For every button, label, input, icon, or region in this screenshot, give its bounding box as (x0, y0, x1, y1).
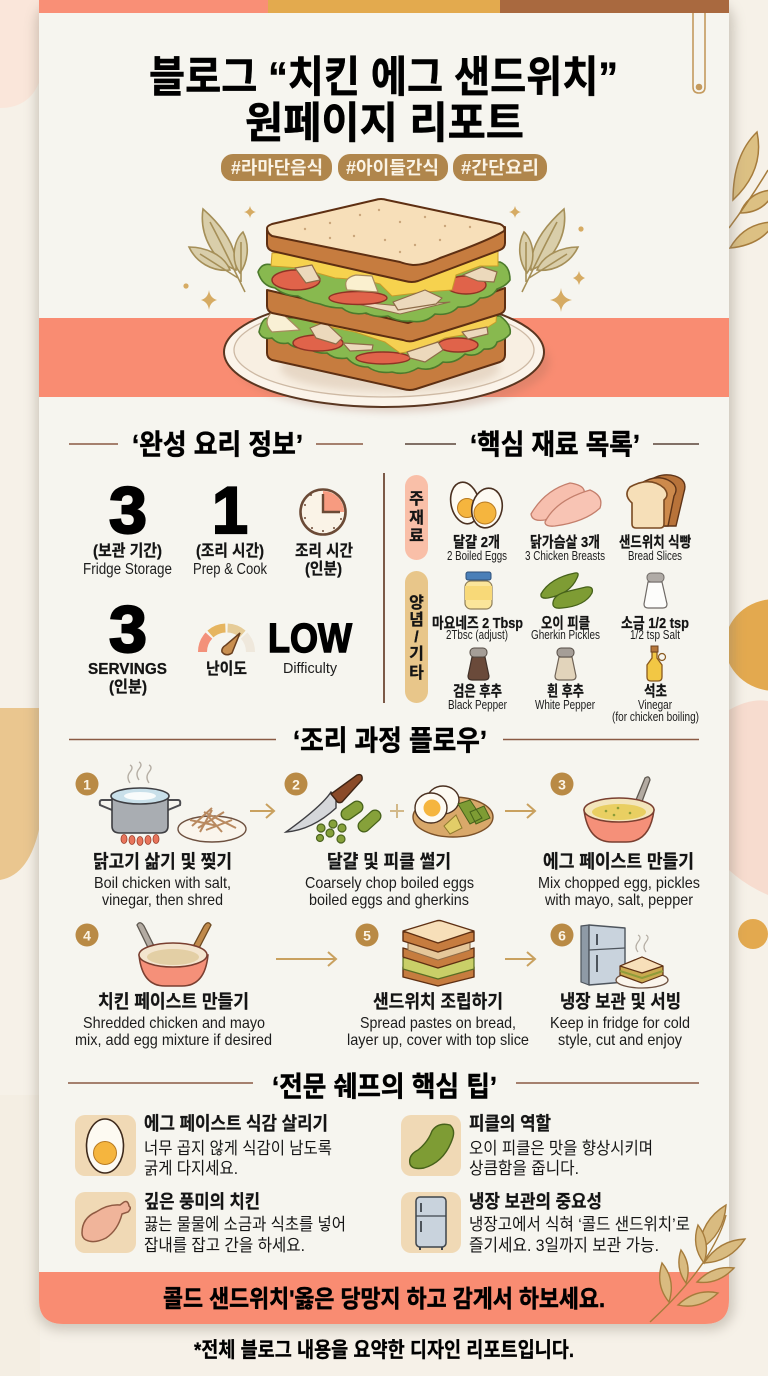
heading: chef tips: ‘전문 쉐프의 핵심 팁’ (272, 1071, 497, 1102)
stat: fridge storage: 3 (109, 473, 147, 547)
tip: role of pickles: 피클의 역할 (469, 1113, 551, 1134)
icon: difficulty gauge (202, 628, 251, 655)
stat: prep and cook time: Prep & Cook (193, 561, 267, 578)
ingredient: chicken breasts: 3 Chicken Breasts (525, 549, 605, 563)
footnote: *전체 블로그 내용을 요약한 디자인 리포트입니다. (194, 1339, 574, 1362)
ingredient: mayonnaise: 2Tbsc (adjust) (446, 628, 508, 642)
step 3: make egg paste: 에그 페이스트 만들기 (543, 851, 694, 872)
ingredient: eggs (447, 480, 507, 563)
arrow: step 2 to 3 (505, 804, 535, 818)
ingredient: vinegar: Vinegar (638, 698, 672, 712)
ingredient: bread slices (619, 475, 691, 563)
step 4: make chicken paste: 치킨 페이스트 만들기 (98, 991, 249, 1012)
step 2: chop eggs and pickles: boiled eggs and gherkins (309, 892, 469, 909)
ingredient: eggs: 2 Boiled Eggs (447, 549, 507, 563)
arrow: step 1 to 2 (250, 804, 274, 818)
step 4: make chicken paste: 4 (83, 928, 91, 944)
top bread (267, 227, 505, 282)
step 2: chop eggs and pickles (284, 772, 493, 909)
panel: finished dish info (69, 429, 363, 696)
category pill: main ingredients (405, 475, 428, 560)
bottom bread (267, 336, 505, 390)
ingredient: chicken breasts (525, 483, 605, 563)
step 3: make egg paste: with mayo, salt, pepper (544, 892, 694, 909)
tip: role of pickles: 상큼함을 줍니다. (469, 1159, 579, 1178)
step 1: boil and shred chicken: 닭고기 삶기 및 찢기 (93, 851, 232, 872)
step 6: refrigerate and serve: Keep in fridge for cold (550, 1015, 690, 1032)
step 5: assemble sandwich: layer up, cover with top slice (347, 1032, 529, 1049)
category pill: seasoning and others: / (414, 629, 419, 646)
step 2: chop eggs and pickles: 2 (292, 776, 300, 792)
hashtag pills: #아이들간식 (346, 158, 439, 178)
stat: fridge storage (83, 473, 172, 578)
icon: sparkles (183, 206, 585, 312)
step 4: make chicken paste: mix, add egg mixture if desired (75, 1032, 272, 1049)
category pill: seasoning and others: 념 (409, 611, 424, 629)
step 3: make egg paste (538, 772, 700, 909)
hashtag pills (221, 154, 547, 181)
category pill: seasoning and others: 기 (409, 645, 424, 663)
title (149, 54, 618, 148)
step 5: assemble sandwich: 샌드위치 조립하기 (373, 991, 503, 1012)
ingredient: white pepper: 흰 후추 (547, 683, 584, 700)
ingredient: black pepper (448, 648, 507, 712)
ingredient: gherkin pickles: 오이 피클 (541, 615, 590, 632)
panel: key ingredients (405, 429, 699, 724)
step 2: chop eggs and pickles: 달걀 및 피클 썰기 (327, 851, 451, 872)
label: difficulty (206, 615, 352, 678)
label: cook time: (인분) (305, 560, 342, 578)
category pill: main ingredients: 주 (409, 491, 424, 508)
stat: servings: 3 (109, 592, 147, 666)
ingredient: bread slices: Bread Slices (628, 549, 682, 563)
ingredient: salt: 1/2 tsp Salt (630, 628, 680, 642)
stat: servings: SERVINGS (88, 661, 167, 678)
ingredient: bread slices: 샌드위치 식빵 (619, 534, 691, 551)
stat: prep and cook time (193, 473, 267, 578)
step 4: make chicken paste: Shredded chicken and mayo (83, 1015, 265, 1032)
ingredient: gherkin pickles: Gherkin Pickles (531, 628, 600, 642)
category pill: main ingredients: 재 (409, 509, 424, 527)
ingredient: white pepper: White Pepper (535, 698, 595, 712)
step 3: make egg paste: 3 (558, 776, 566, 792)
step 1: boil and shred chicken (76, 762, 246, 909)
ingredient: vinegar (612, 646, 699, 724)
hashtag pills: #간단요리 (461, 158, 539, 178)
heading: finished dish info: ‘완성 요리 정보’ (132, 429, 303, 460)
title: 원페이지 리포트 (245, 100, 524, 148)
footer banner text: 콜드 샌드위치'옳은 당망지 하고 감게서 하보세요. (163, 1286, 605, 1313)
ingredient: black pepper: 검은 후추 (453, 683, 502, 700)
tip: deep flavour chicken: 깊은 풍미의 치킨 (144, 1191, 260, 1212)
ingredient: salt (621, 573, 689, 642)
category pill: seasoning and others: 타 (409, 664, 424, 682)
ingredient: black pepper: Black Pepper (448, 698, 507, 712)
tip: role of pickles (401, 1113, 653, 1178)
label: difficulty: Difficulty (283, 660, 337, 677)
step 6: refrigerate and serve: 6 (558, 928, 566, 944)
category pill: seasoning and others (405, 571, 428, 703)
step 6: refrigerate and serve (550, 924, 690, 1049)
icon: clock (300, 490, 346, 534)
stat: servings (88, 592, 167, 696)
plate (224, 297, 550, 412)
step 3: make egg paste: Mix chopped egg, pickles (538, 875, 700, 892)
ingredient: gherkin pickles (531, 573, 600, 642)
ingredient: vinegar: (for chicken boiling) (612, 710, 699, 724)
tip: deep flavour chicken (75, 1191, 346, 1255)
tip: importance of refrigeration: 냉장 보관의 중요성 (469, 1191, 602, 1212)
tip: egg paste texture (75, 1113, 332, 1178)
category pill: seasoning and others: 양 (409, 594, 424, 612)
arrow: step 5 to 6 (505, 952, 535, 966)
label: difficulty: 난이도 (206, 660, 247, 678)
heading: cooking process flow: ‘조리 과정 플로우’ (293, 725, 487, 756)
arrow: step 4 to 5 (276, 952, 336, 966)
tip: importance of refrigeration: 즐기세요. 3일까지 보관 가능. (469, 1236, 659, 1255)
upper filling (258, 250, 510, 322)
tip: egg paste texture: 굵게 다지세요. (144, 1159, 238, 1178)
tip: egg paste texture: 너무 곱지 않게 식감이 남도록 (144, 1139, 332, 1158)
stat: fridge storage: (보관 기간) (93, 542, 162, 560)
step 5: assemble sandwich: Spread pastes on bread, (360, 1015, 516, 1032)
stat: fridge storage: Fridge Storage (83, 561, 172, 578)
tip: deep flavour chicken: 잡내를 잡고 간을 하세요. (144, 1236, 305, 1255)
ingredient: vinegar: 석초 (644, 683, 667, 700)
lower filling (259, 310, 510, 373)
category pill: main ingredients: 료 (409, 528, 424, 545)
step 6: refrigerate and serve: 냉장 보관 및 서빙 (560, 991, 681, 1012)
tip: role of pickles: 오이 피클은 맛을 향상시키며 (469, 1139, 653, 1158)
icon: bottom right leaf sprig (650, 1205, 745, 1322)
title: 블로그 “치킨 에그 샌드위치” (149, 54, 618, 102)
step 5: assemble sandwich (347, 920, 529, 1049)
step 2: chop eggs and pickles: Coarsely chop boiled eggs (305, 875, 474, 892)
step 1: boil and shred chicken: vinegar, then shred (102, 892, 223, 909)
tip: deep flavour chicken: 끓는 물물에 소금과 식초를 넣어 (144, 1215, 346, 1234)
icon: left decorative sprig (189, 209, 247, 292)
tip: egg paste texture: 에그 페이스트 식감 살리기 (144, 1113, 328, 1134)
hashtag pills: #라마단음식 (231, 158, 323, 178)
step 1: boil and shred chicken: Boil chicken with salt, (94, 875, 231, 892)
step 6: refrigerate and serve: style, cut and enjoy (558, 1032, 682, 1049)
middle bread (267, 288, 505, 341)
icon: bookmark hanger (693, 13, 705, 93)
ingredient: chicken breasts: 닭가슴살 3개 (530, 534, 600, 551)
label: difficulty: LOW (268, 615, 352, 661)
vertical divider (383, 473, 385, 703)
icon: right decorative sprig (520, 209, 578, 292)
stat: prep and cook time: 1 (212, 473, 248, 547)
step 4: make chicken paste (75, 923, 272, 1049)
icon: right edge leaf sprig (729, 132, 768, 248)
label: cook time: 조리 시간 (295, 542, 353, 560)
label: cook time (295, 542, 353, 578)
panel: chef tips (68, 1071, 699, 1255)
ingredient: mayonnaise: 마요네즈 2 Tbsp (432, 615, 523, 632)
heading: key ingredients: ‘핵심 재료 목록’ (470, 429, 640, 460)
tip: importance of refrigeration: 냉장고에서 식혀 ‘콜드 샌드위치’로 (469, 1215, 690, 1234)
stat: servings: (인분) (109, 678, 147, 696)
stat: prep and cook time: (조리 시간) (196, 542, 264, 560)
step 5: assemble sandwich: 5 (363, 928, 371, 944)
panel: cooking process flow (69, 725, 700, 1049)
ingredient: mayonnaise (432, 572, 523, 642)
tip: importance of refrigeration (401, 1191, 690, 1255)
hero illustration: sandwich on plate (224, 199, 550, 412)
ingredient: white pepper (535, 648, 595, 712)
step 1: boil and shred chicken: 1 (83, 776, 91, 792)
ingredient: eggs: 달걀 2개 (453, 534, 500, 551)
ingredient: salt: 소금 1/2 tsp (621, 615, 689, 632)
